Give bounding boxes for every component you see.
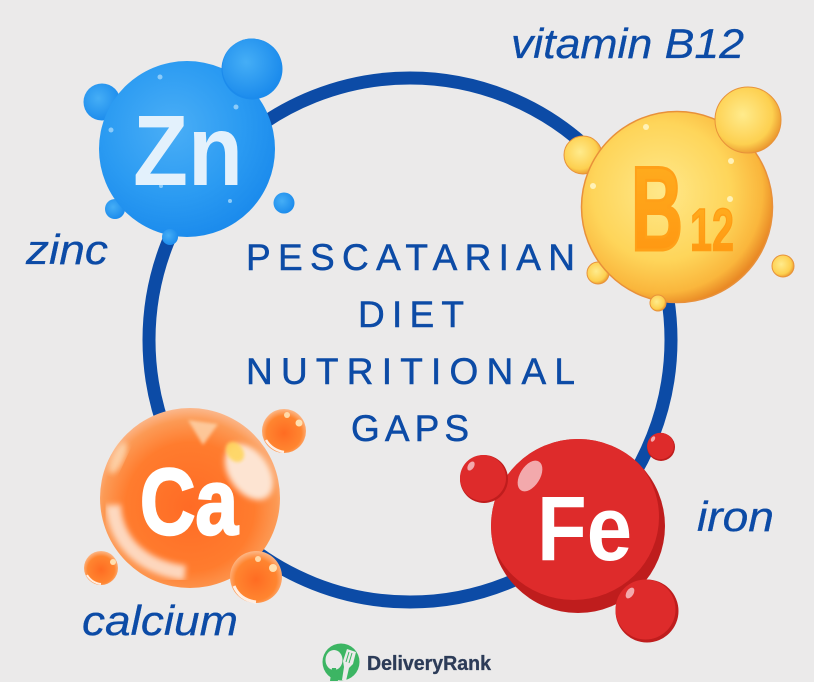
- icon: spoon and fork: [322, 644, 360, 681]
- sub-bubble: lower left: [84, 551, 118, 585]
- sub-bubble: upper right: [262, 409, 306, 453]
- sub-bubble: lower right: [230, 551, 282, 603]
- title: GAPS: [351, 408, 469, 449]
- icon: iron bubble: [460, 433, 678, 642]
- title: DIET: [358, 294, 464, 335]
- label: iron: iron: [697, 493, 774, 540]
- icon: iron bubble: Fe: [537, 478, 632, 580]
- title: [246, 237, 575, 449]
- logo: DeliveryRank: [322, 644, 492, 681]
- icon: zinc bubble: Zn: [133, 95, 243, 207]
- connecting ring: [149, 78, 671, 602]
- title: NUTRITIONAL: [246, 351, 575, 392]
- icon: vitamin B12 bubble: 12: [690, 196, 734, 264]
- label: calcium: calcium: [82, 597, 238, 644]
- label: zinc: zinc: [25, 226, 108, 273]
- icon: calcium bubble: Ca: [140, 449, 239, 554]
- icon: calcium bubble: [84, 408, 306, 603]
- icon: zinc bubble: [84, 38, 294, 245]
- title: PESCATARIAN: [246, 237, 575, 278]
- icon: vitamin B12 bubble: [564, 87, 794, 311]
- icon: vitamin B12 bubble: B: [631, 142, 683, 276]
- logo: DeliveryRank: DeliveryRank: [367, 653, 492, 675]
- label: vitamin B12: vitamin B12: [511, 20, 744, 67]
